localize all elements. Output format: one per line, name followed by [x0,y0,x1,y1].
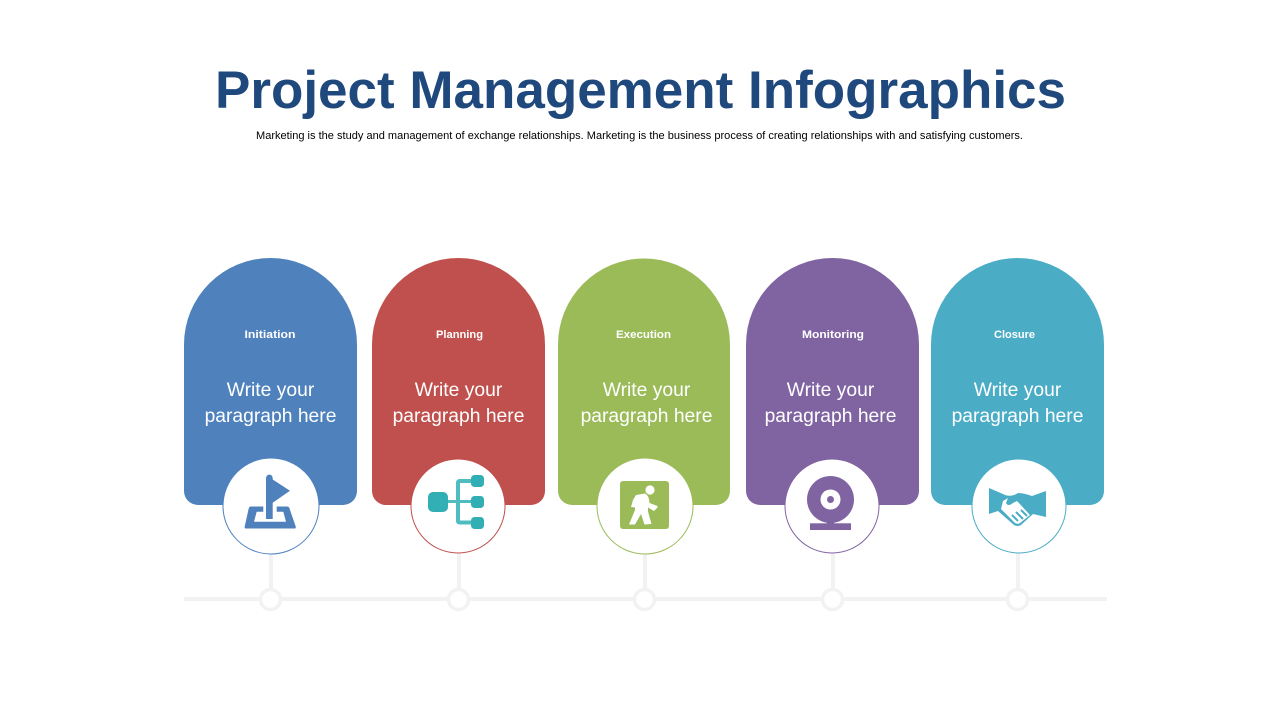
icon: handshake [989,488,1046,526]
panel: execution [558,258,730,554]
timeline [184,552,1107,610]
paragraph: closure: Write your [974,380,1062,401]
title: Project Management Infographics [215,61,1066,120]
heading: execution: Execution [616,329,671,341]
panel: planning [372,258,545,553]
icon: pedestrian sign [620,481,669,529]
paragraph: initiation: paragraph here [205,406,336,427]
paragraph: planning: Write your [415,380,503,401]
icon circle: closure [972,459,1066,553]
panel: initiation [184,258,357,554]
icon circle: execution [597,458,693,554]
icon: webcam [807,476,854,530]
subtitle: Marketing is the study and management of exchange relationships. Marketing is the business process of creating relationships with and satisfying customers. [256,130,1023,142]
paragraph: execution: paragraph here [581,406,712,427]
heading: closure: Closure [994,329,1035,341]
paragraph: closure: paragraph here [952,406,1083,427]
panel: closure [931,258,1104,553]
icon: hierarchy [428,475,484,529]
heading: initiation: Initiation [244,329,296,341]
icon circle: initiation [223,458,319,554]
icon: flag on map [245,475,296,528]
heading: monitoring: Monitoring [802,329,864,341]
icon circle: monitoring [785,459,879,553]
paragraph: execution: Write your [603,380,691,401]
icon circle: planning [411,459,505,553]
paragraph: initiation: Write your [227,380,315,401]
paragraph: monitoring: paragraph here [765,406,896,427]
paragraph: planning: paragraph here [393,406,524,427]
panel: monitoring [746,258,919,553]
paragraph: monitoring: Write your [787,380,875,401]
heading: planning: Planning [436,329,483,341]
